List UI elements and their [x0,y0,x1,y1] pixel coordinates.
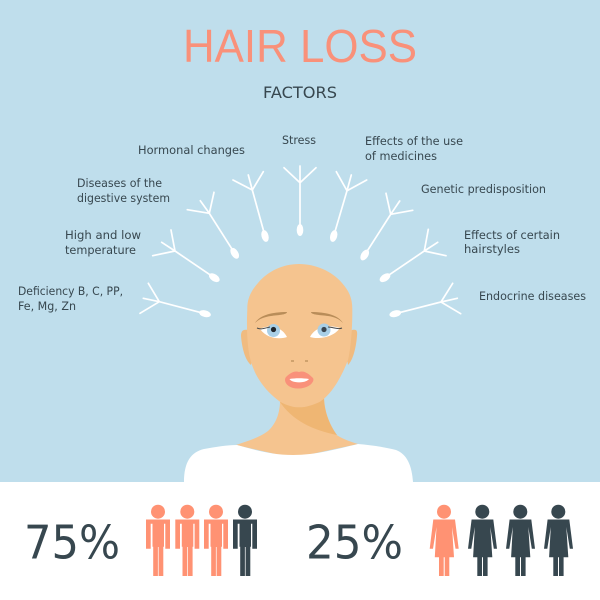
statistic: men 75%: 75% [24,516,120,570]
factor labels: High and low [65,228,141,242]
factor labels: Deficiency B, C, PP, [18,284,123,298]
nose [291,360,308,362]
factor labels: digestive system [77,191,170,205]
factor labels: Genetic predisposition [421,182,546,196]
factor labels: Hormonal changes [138,143,245,157]
subtitle: FACTORS [263,83,337,102]
hair strands [140,166,461,318]
neck [236,395,358,458]
eyebrows [255,312,343,323]
title: HAIR LOSS [183,20,417,72]
factor labels: Stress [282,133,316,147]
eyes [260,326,340,338]
factor labels: hairstyles [464,242,520,256]
factor labels: Effects of the use [365,134,463,148]
neck shadow [280,398,337,435]
factor labels: of medicines [365,149,437,163]
statistic: women 25%: 25% [306,516,403,570]
head [247,264,352,407]
factor labels [18,133,586,313]
factor labels: Effects of certain [464,228,560,242]
male icons [146,505,228,576]
statistic: women 25% [306,505,573,576]
factor labels: Diseases of the [77,176,162,190]
female icons [430,505,459,576]
shirt [184,444,413,482]
factor labels: temperature [65,243,136,257]
woman portrait [184,264,413,482]
factor labels: Endocrine diseases [479,289,586,303]
lips [285,371,313,388]
statistic: men 75% [24,505,257,576]
factor labels: Fe, Mg, Zn [18,299,76,313]
ears [241,330,357,365]
